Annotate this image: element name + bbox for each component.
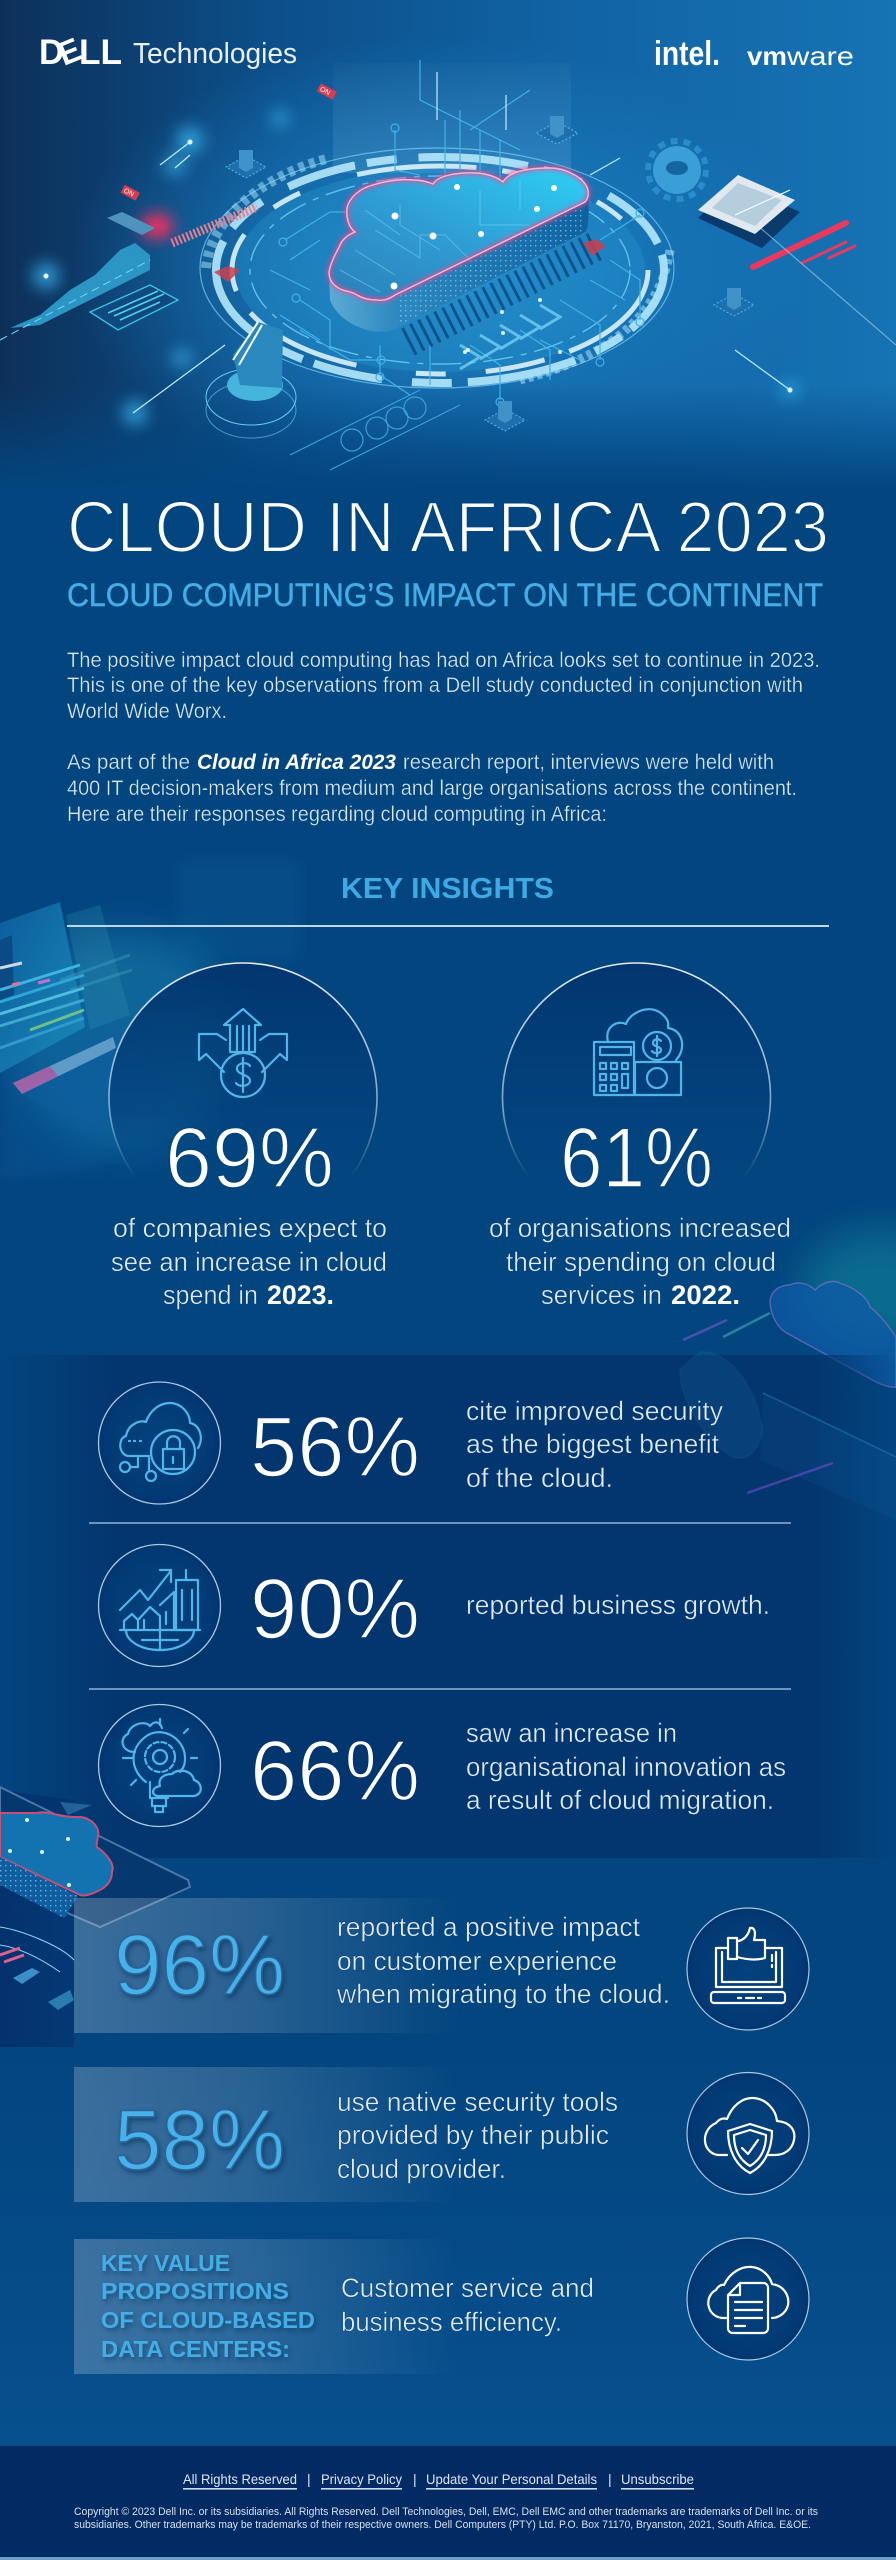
logo: Dell Technologies: LL (79, 33, 122, 72)
dark stats band (0, 1355, 896, 1858)
caption 61%: 2022. (671, 1280, 740, 1310)
footer links: Privacy Policy (321, 2471, 402, 2487)
stat row 66% (98, 1704, 786, 1826)
background art: tablet with cloud, left (0, 1787, 190, 2047)
bottom circles strip (290, 390, 460, 470)
red bars (753, 223, 855, 267)
red markers on ring (214, 239, 606, 282)
text: customer service: business efficiency. (341, 2307, 562, 2337)
icon ring: laptop thumbs up (687, 1908, 809, 2030)
text 56%: of the cloud. (466, 1463, 613, 1493)
footer links: | (307, 2471, 311, 2487)
caption 61%: services in (541, 1280, 662, 1310)
left text panel (90, 285, 178, 330)
small chips (226, 116, 754, 431)
icon: cloud padlock (120, 1403, 201, 1481)
footer links: Unsubscribe (621, 2471, 694, 2487)
text 66%: a result of cloud migration. (466, 1785, 774, 1815)
stat 96%: 96% (114, 1918, 285, 2013)
icon ring: cloud shield (687, 2072, 809, 2194)
circle panel 61% (489, 963, 791, 1310)
logo: VMware: vm (747, 41, 787, 71)
stat 58%: 58% (114, 2093, 285, 2188)
label: key value propositions: OF CLOUD-BASED (101, 2307, 315, 2333)
intro paragraph 2: 400 IT decision-makers from medium and large organisations across the continent. (67, 777, 797, 800)
caption 69%: spend in (163, 1280, 258, 1310)
subtitle: CLOUD COMPUTING’S IMPACT ON THE CONTINENT (67, 577, 823, 613)
label: key value propositions (101, 2250, 315, 2362)
text 66%: organisational innovation as (466, 1752, 786, 1782)
text 96% (336, 1912, 670, 2009)
intro paragraph 1: This is one of the key observations from a Dell study conducted in conjunction with (67, 674, 803, 697)
stat row 90% (98, 1544, 770, 1666)
footer (0, 2446, 896, 2560)
intro paragraph 2 (67, 751, 797, 826)
stat 61%: 61% (560, 1111, 713, 1206)
gear (648, 141, 706, 199)
text 58%: use native security tools (337, 2087, 618, 2117)
intro paragraph 1 (67, 649, 820, 723)
icon: cloud calculator cash (594, 1009, 682, 1095)
label: key value propositions: KEY VALUE (101, 2250, 230, 2276)
footer links: Update Your Personal Details (426, 2471, 597, 2487)
highlight panel: 96% (74, 1898, 809, 2033)
text 58%: cloud provider. (337, 2154, 506, 2184)
caption 61% (489, 1213, 791, 1310)
caption 61%: of organisations increased (489, 1213, 791, 1243)
title: CLOUD IN AFRICA 2023 (67, 488, 829, 568)
glowing light streaks (33, 72, 896, 425)
copyright: subsidiaries. Other trademarks may be trademarks of their respective owners. Dell Computers (PTY) Ltd. P.O. Box 71170, Bryanston, 2021, South Africa. E&OE. (74, 2519, 811, 2531)
pink bar and status pill: ON (318, 86, 331, 97)
circuit traces (270, 60, 644, 406)
intro paragraph 2: Cloud in Africa 2023 (197, 751, 396, 774)
icon: money arrows (199, 1009, 287, 1097)
logo: VMware: ware (786, 41, 854, 71)
intro paragraph 1: World Wide Worx. (67, 700, 227, 723)
logo: Dell Technologies (39, 30, 297, 72)
heading: key insights: KEY INSIGHTS (341, 873, 554, 905)
stat 90%: 90% (250, 1562, 420, 1657)
text 66% (466, 1718, 786, 1815)
text 56%: cite improved security (466, 1396, 723, 1426)
logo: Dell Technologies: D (39, 33, 64, 72)
text: customer service (341, 2273, 594, 2337)
background art: laptop, left (0, 860, 300, 1180)
logo: Dell Technologies: Technologies (133, 38, 297, 70)
icon ring: cloud document (687, 2238, 809, 2360)
highlight panel: key value propositions (74, 2238, 809, 2374)
copyright (74, 2506, 818, 2531)
text 96%: reported a positive impact (337, 1912, 640, 1942)
logo: Intel: intel. (654, 35, 720, 73)
text: customer service: Customer service and (341, 2273, 594, 2303)
intro paragraph 2: research report, interviews were held with (403, 751, 774, 774)
footer links (183, 2471, 694, 2490)
rings around the cloud (200, 148, 674, 388)
pedestal column (206, 322, 296, 438)
background art: translucent cloud, right (683, 1230, 896, 1387)
text 58% (337, 2087, 618, 2184)
logo: Dell Technologies: E (53, 30, 86, 72)
caption 69%: see an increase in cloud (111, 1247, 387, 1277)
footer links: All Rights Reserved (183, 2471, 297, 2487)
text 96%: on customer experience (337, 1946, 617, 1976)
text 66%: saw an increase in (466, 1718, 677, 1748)
intro paragraph 2: Here are their responses regarding cloud computing in Africa: (67, 803, 607, 826)
pink bar and status pill (107, 83, 337, 243)
label: key value propositions: PROPOSITIONS (101, 2278, 289, 2304)
text 96%: when migrating to the cloud. (336, 1979, 670, 2009)
stat 66%: 66% (250, 1724, 420, 1819)
processor chip (698, 175, 800, 248)
left data chart (0, 243, 150, 340)
teeth under the cloud (408, 244, 600, 342)
circle panel 69% (109, 963, 387, 1310)
caption 69%: of companies expect to (113, 1213, 387, 1243)
3D cloud (329, 168, 589, 332)
footer links: | (413, 2471, 417, 2487)
stat 56%: 56% (250, 1400, 420, 1495)
caption 69% (111, 1213, 387, 1310)
text 58%: provided by their public (337, 2120, 609, 2150)
footer links: | (608, 2471, 612, 2487)
intro paragraph 1: The positive impact cloud computing has had on Africa looks set to continue in 2023. (67, 649, 820, 672)
label: key value propositions: DATA CENTERS: (101, 2336, 290, 2362)
highlight panel: 58% (74, 2067, 809, 2202)
caption 69%: 2023. (267, 1280, 334, 1310)
logo: VMware (747, 41, 854, 71)
copyright: Copyright © 2023 Dell Inc. or its subsidiaries. All Rights Reserved. Dell Technologies, Dell, EMC, Dell EMC and other trademarks are trademarks of Dell Inc. or its (74, 2506, 818, 2518)
icon: growth city globe (120, 1570, 200, 1650)
text 56%: as the biggest benefit (466, 1429, 719, 1459)
hero illustration: cloud computing (0, 0, 896, 495)
divider lines (89, 1523, 791, 1689)
icon: lightbulb gear clouds (123, 1719, 201, 1812)
intro paragraph 2: As part of the (67, 751, 190, 774)
pink bar and status pill: ON (122, 187, 135, 199)
text 90%: reported business growth. (466, 1590, 770, 1620)
stat row 56% (98, 1382, 723, 1504)
text 56% (466, 1396, 723, 1493)
caption 61%: their spending on cloud (506, 1247, 776, 1277)
stat 69%: 69% (165, 1111, 334, 1206)
background art: shield and stripes, right (680, 1352, 896, 1520)
